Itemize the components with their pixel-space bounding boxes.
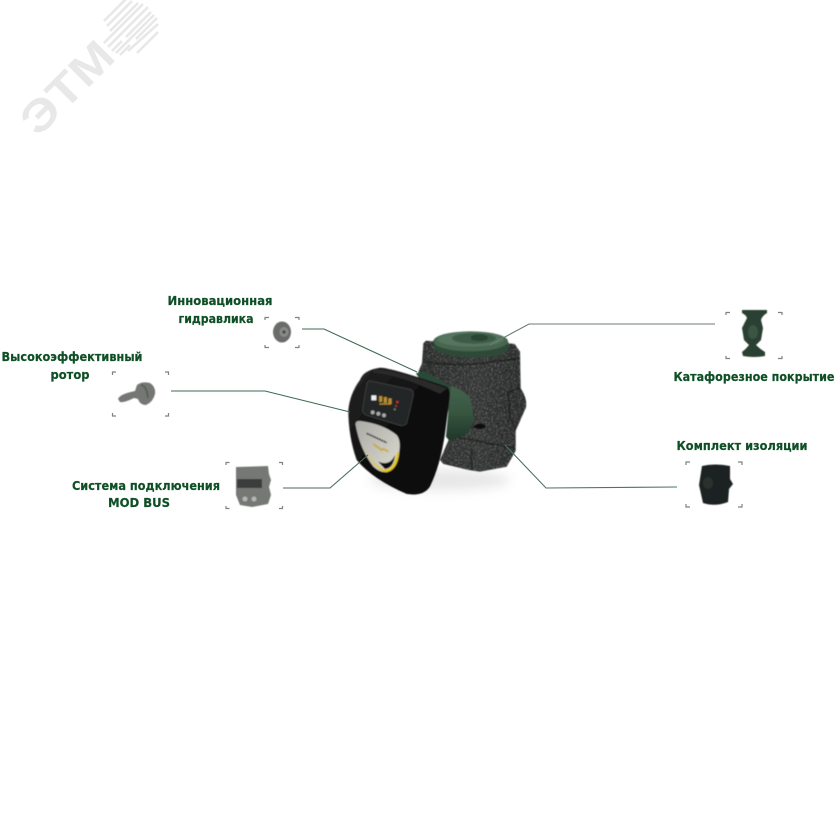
heading: Инновационная [168, 293, 272, 308]
pump illustration [348, 331, 526, 495]
watermark text: ЭТМ [10, 31, 124, 145]
green motor body [416, 371, 487, 441]
frame brackets [265, 318, 299, 348]
display panel [362, 381, 413, 425]
callout: Катафорезное покрытие [674, 310, 834, 384]
pump shadow [370, 469, 510, 491]
heading: Высокоэффективный [2, 349, 142, 364]
icon: MOD BUS module [236, 466, 271, 507]
icon: insulation shell [699, 464, 733, 505]
icon: rotor [118, 382, 155, 405]
icon: impeller [273, 322, 291, 342]
frame brackets [226, 462, 282, 508]
line: MOD BUS [283, 455, 368, 488]
callout lines [171, 324, 715, 488]
callout: Система подключения MOD BUS: MOD BUS [108, 495, 170, 510]
callout: Высокоэффективный ротор [2, 349, 168, 416]
frame brackets [726, 312, 782, 358]
insulation folds [423, 358, 520, 470]
silver badge with yellow swoosh [355, 421, 400, 472]
insulation texture [418, 341, 526, 472]
frame brackets [112, 372, 168, 416]
callout: Комплект изоляции [676, 438, 808, 507]
line: insulation [505, 445, 677, 488]
line: rotor [171, 391, 350, 412]
watermark emblem [104, 0, 158, 55]
watermark: ЭТМ logo [10, 0, 158, 145]
heading: Комплект изоляции [676, 438, 808, 453]
callout: Высокоэффективный ротор: ротор [50, 367, 90, 382]
heading: Система подключения [72, 478, 220, 493]
line: hydraulics [302, 329, 417, 372]
control head [348, 368, 450, 495]
callout: Инновационная гидравлика: гидравлика [178, 311, 254, 326]
icon: pump casing [742, 310, 767, 357]
callout: Инновационная гидравлика [168, 293, 299, 348]
callout: Система подключения MOD BUS [72, 462, 282, 510]
insulation shell [418, 341, 526, 472]
flange top [432, 331, 510, 359]
frame brackets [686, 462, 742, 507]
line: coating [490, 324, 715, 345]
